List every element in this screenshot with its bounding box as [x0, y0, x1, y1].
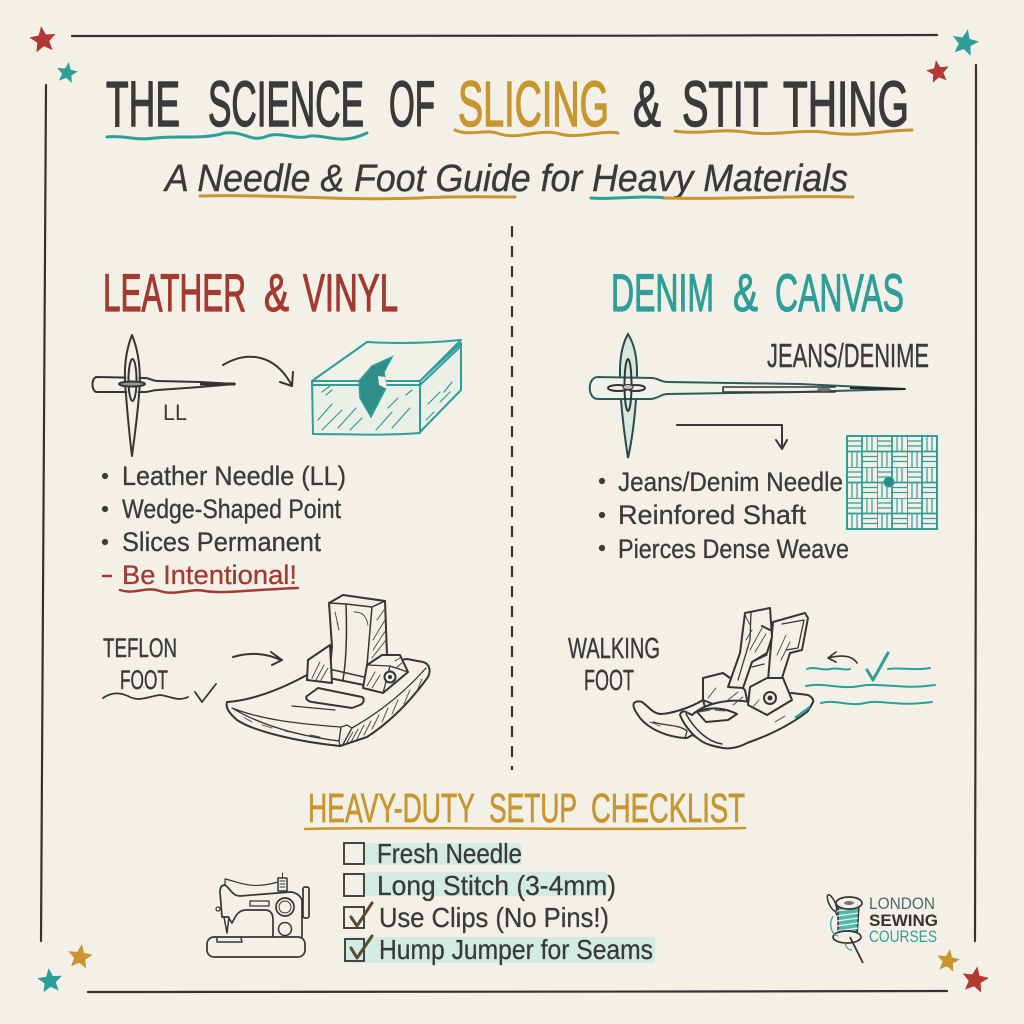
label: LL: LL: [163, 400, 187, 425]
subtitle underlines: [200, 196, 853, 199]
text: logo wordmark: COURSES: [869, 928, 937, 946]
icon: leather needle: [92, 335, 235, 456]
title: SLICING: [458, 68, 609, 140]
icon: denim needle: [590, 334, 905, 458]
text: logo wordmark: SEWING: [869, 912, 938, 930]
label: walking foot: FOOT: [584, 665, 634, 697]
title: [106, 68, 909, 140]
heading: denim and canvas: &: [733, 264, 758, 323]
text: checklist items: Use Clips (No Pins!): [379, 902, 609, 933]
text: denim bullet list: Pierces Dense Weave: [618, 534, 849, 564]
center dashed divider: [511, 226, 513, 770]
heading: denim and canvas: [611, 264, 904, 323]
panel: leather and vinyl: [92, 264, 461, 746]
heading: leather and vinyl: VINYL: [303, 264, 398, 323]
icon: leather block with slice: [312, 340, 461, 435]
text: logo wordmark: LONDON: [869, 895, 935, 913]
text: leather bullet list: Wedge-Shaped Point: [122, 494, 341, 524]
title: THE: [106, 68, 180, 140]
text: leather bullet list: Leather Needle (LL): [122, 461, 346, 491]
text: leather bullet list: [102, 461, 346, 593]
icon: sewing machine: [207, 873, 309, 957]
text: checklist items: Fresh Needle: [377, 838, 522, 869]
label: teflon foot: [103, 633, 177, 695]
logo: london sewing courses: [825, 894, 938, 963]
icon: spool and needle: [825, 894, 863, 963]
text: leather bullet list: Slices Permanent: [122, 527, 321, 557]
heading: denim and canvas: DENIM: [611, 264, 714, 323]
check marks: [351, 903, 372, 958]
title: THING: [783, 68, 909, 140]
title underlines: [107, 130, 912, 139]
label: jeans denime: JEANS/DENIME: [767, 337, 929, 374]
arrow: needle to leather block: [223, 357, 293, 386]
heading: checklist: SETUP: [489, 785, 577, 831]
label: teflon foot: FOOT: [120, 665, 168, 695]
label: teflon foot: TEFLON: [103, 633, 177, 663]
icon: dense weave swatch: [847, 436, 937, 529]
subtitle: A Needle & Foot Guide for Heavy Materials: [163, 158, 848, 200]
panel: heavy duty setup checklist: [207, 785, 745, 965]
heading: checklist: HEAVY-DUTY: [308, 785, 475, 831]
title: &: [633, 68, 661, 140]
text: logo wordmark: [869, 895, 938, 946]
check boxes: [344, 843, 364, 961]
text: denim bullet list: [599, 467, 849, 564]
title: OF: [389, 68, 435, 140]
stitch lines with arrow and check: [806, 652, 935, 704]
label: walking foot: [568, 633, 660, 697]
text: checklist items: Hump Jumper for Seams: [379, 934, 653, 965]
arrow: label to teflon foot: [233, 652, 282, 665]
wavy line and check mark: [103, 684, 216, 702]
heading: leather and vinyl: &: [264, 264, 289, 323]
heading: checklist: [308, 785, 745, 831]
heading: checklist: CHECKLIST: [591, 785, 745, 831]
heading: leather and vinyl: LEATHER: [103, 264, 246, 323]
heading: denim and canvas: CANVAS: [775, 264, 904, 323]
heading underline: [305, 828, 745, 829]
highlights behind checklist: [345, 843, 655, 963]
label: walking foot: WALKING: [568, 633, 660, 665]
panel: denim and canvas: [568, 264, 937, 748]
title: STIT: [682, 68, 768, 140]
text: leather bullet list: Be Intentional!: [122, 560, 297, 590]
text: checklist items: Long Stitch (3-4mm): [377, 870, 616, 901]
title: SCIENCE: [208, 68, 364, 140]
text: checklist items: [377, 838, 653, 965]
arrow: needle to weave: [677, 425, 787, 449]
text: denim bullet list: Reinfored Shaft: [618, 500, 806, 530]
icon: teflon presser foot: [227, 595, 430, 746]
text: denim bullet list: Jeans/Denim Needle: [618, 467, 843, 497]
icon: walking presser foot: [633, 608, 813, 748]
